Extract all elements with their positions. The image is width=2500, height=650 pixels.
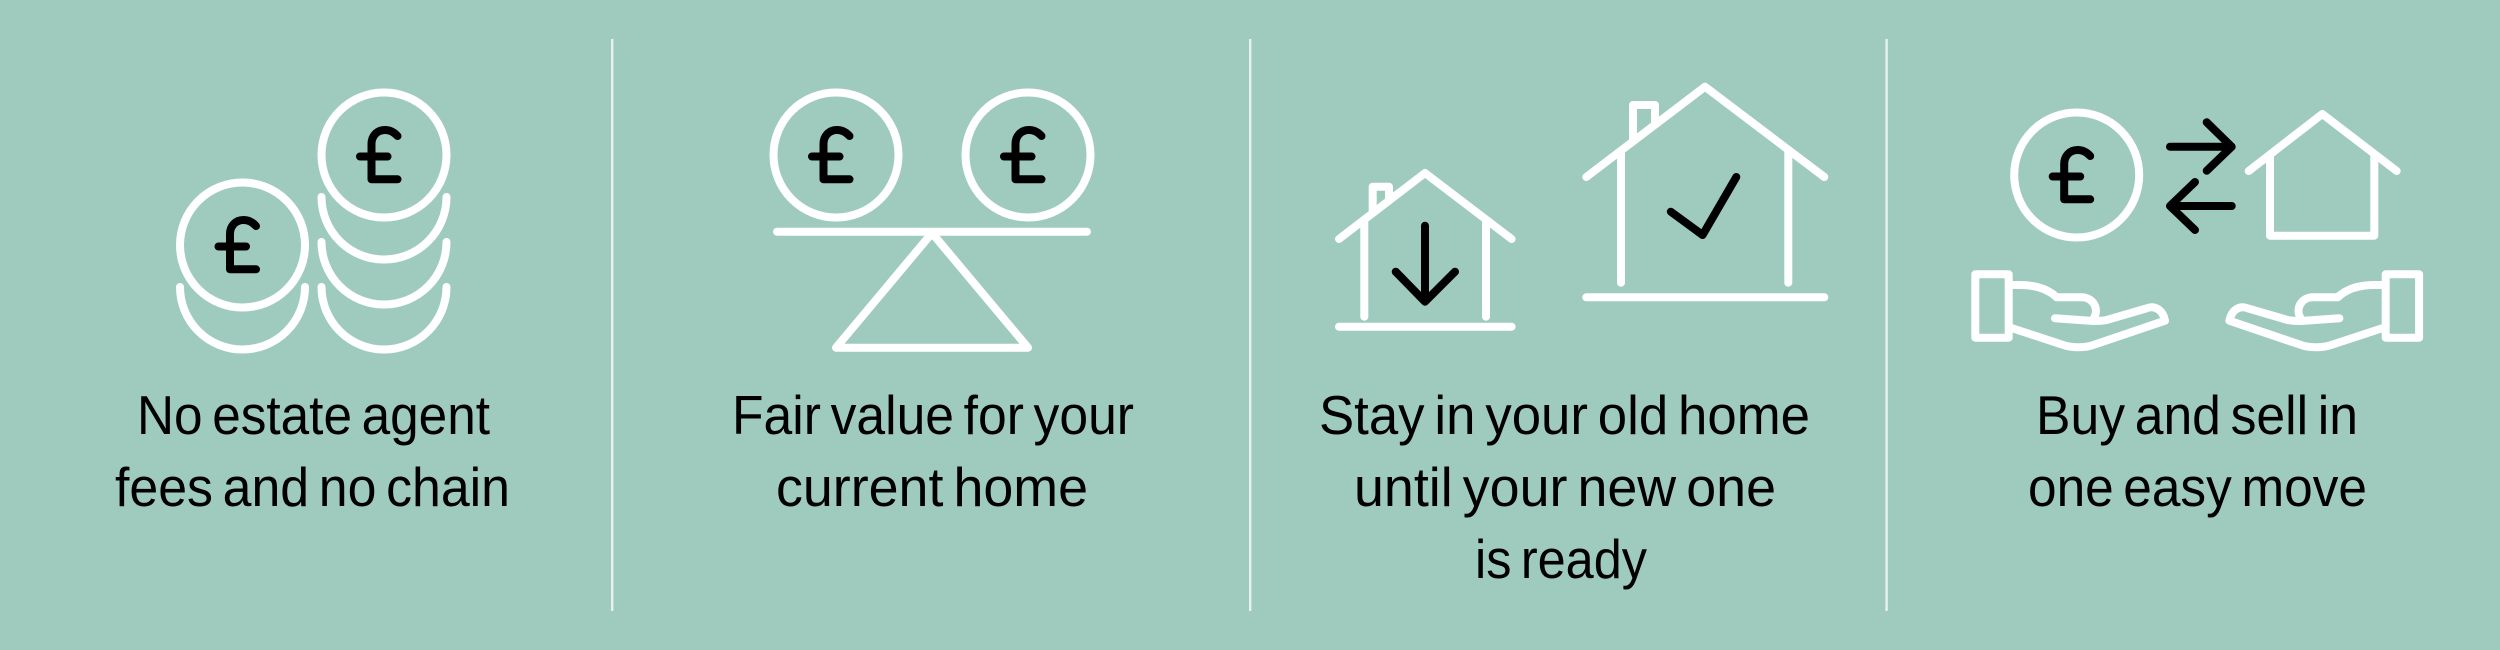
panel: buy and sell: [1975, 112, 2419, 518]
icon: pound coin: [2014, 112, 2139, 238]
icon: large house with tick: [1586, 87, 1824, 297]
caption: stay until ready: [1319, 384, 1810, 590]
icon: left open hand: [1975, 274, 2165, 347]
panel: no estate agent fees: [115, 92, 510, 518]
caption: stay until ready: is ready: [1475, 528, 1647, 590]
icon: simple house: [2249, 114, 2397, 236]
caption: no estate agent fees: No estate agent: [137, 384, 490, 446]
panel: fair value: [732, 92, 1134, 518]
icon: small house with down arrow: [1339, 173, 1512, 327]
caption: buy and sell: one easy move: [2028, 456, 2367, 518]
icon: stacks of pound coins: [180, 92, 446, 350]
icon: balance with two pound coins: [774, 92, 1090, 348]
caption: no estate agent fees: fees and no chain: [115, 456, 510, 518]
caption: buy and sell: Buy and sell in: [2036, 384, 2358, 446]
panel: stay in your old home: [1319, 87, 1824, 590]
icon: exchange arrows: [2170, 122, 2232, 230]
caption: fair value: current home: [776, 456, 1088, 518]
caption: stay until ready: Stay in your old home: [1319, 384, 1810, 446]
caption: fair value: [732, 384, 1134, 518]
icon: right open hand: [2229, 274, 2419, 347]
caption: fair value: Fair value for your: [732, 384, 1134, 446]
caption: no estate agent fees: [115, 384, 510, 518]
caption: stay until ready: until your new one: [1354, 456, 1776, 518]
caption: buy and sell: [2028, 384, 2367, 518]
